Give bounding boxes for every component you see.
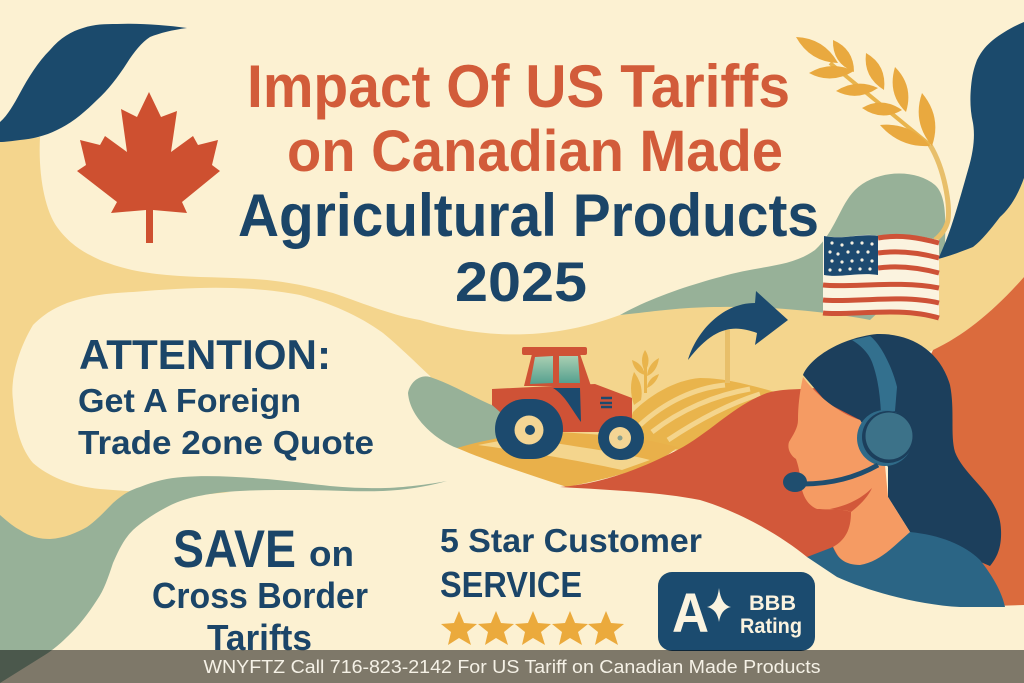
footer bar: WNYFTZ Call 716-823-2142 For US Tariff on Canadian Made Products [204, 656, 820, 677]
badge: BBB rating: BBB [749, 592, 796, 615]
background: orange wave right [900, 277, 1024, 607]
background: cream bubble [12, 288, 567, 492]
agent hair [803, 334, 1001, 566]
agent shirt [807, 532, 1005, 607]
text: attention: Trade 2one Quote [78, 424, 374, 461]
icon: small wheat plant [631, 350, 659, 405]
lower field [457, 432, 678, 487]
background: red wave [560, 388, 860, 565]
icon: field [457, 378, 775, 487]
background: yellow wave [0, 137, 1024, 560]
icon: maple leaf [77, 92, 220, 243]
background: lower-left sage shape [0, 476, 447, 683]
text: save on tariffs: Tarifts [207, 617, 312, 658]
text: save on tariffs [152, 520, 368, 658]
icon: wheat stem [930, 145, 948, 240]
post behind arrow [725, 330, 730, 383]
background: sage patch by tractor [408, 376, 505, 450]
icon: navy leaf top right [938, 22, 1024, 259]
tractor body [492, 384, 632, 432]
icon: wheat ear [796, 37, 935, 146]
background: upper sage wave [620, 174, 945, 320]
icon: tractor [492, 347, 644, 460]
tractor rear wheel [495, 399, 563, 459]
text: save on tariffs: SAVE [173, 520, 296, 579]
tractor front wheel [598, 416, 644, 460]
text: customer service: SERVICE [440, 564, 582, 605]
text: customer service [440, 522, 702, 605]
tractor cab [524, 354, 591, 386]
title: on Canadian Made [287, 119, 783, 184]
headset microphone [803, 465, 878, 484]
arrow [688, 291, 788, 360]
title: 2025 [455, 250, 587, 313]
title: Impact Of US Tariffs [247, 53, 790, 120]
badge: BBB rating: Rating [740, 615, 802, 638]
icon: five stars [441, 611, 624, 645]
title: Agricultural Products [238, 182, 819, 249]
icon: customer service agent [783, 334, 1005, 607]
badge: BBB rating: A [672, 581, 709, 644]
text: attention: Get A Foreign [78, 382, 301, 419]
title [238, 53, 819, 313]
agent jaw shadow [830, 488, 872, 512]
agent face and neck [788, 377, 910, 565]
headset band [852, 336, 897, 413]
badge: BBB rating [658, 572, 815, 651]
text: attention: ATTENTION: [79, 331, 331, 378]
icon: navy leaf top left [0, 24, 187, 142]
text: attention [78, 331, 374, 461]
icon: US flag [823, 234, 939, 320]
text: save on tariffs: on [309, 533, 354, 574]
back hill [625, 378, 775, 450]
text: customer service: 5 Star Customer [440, 522, 702, 559]
headset ear cup [857, 410, 913, 466]
text: save on tariffs: Cross Border [152, 575, 368, 616]
footer bar [0, 650, 1024, 683]
